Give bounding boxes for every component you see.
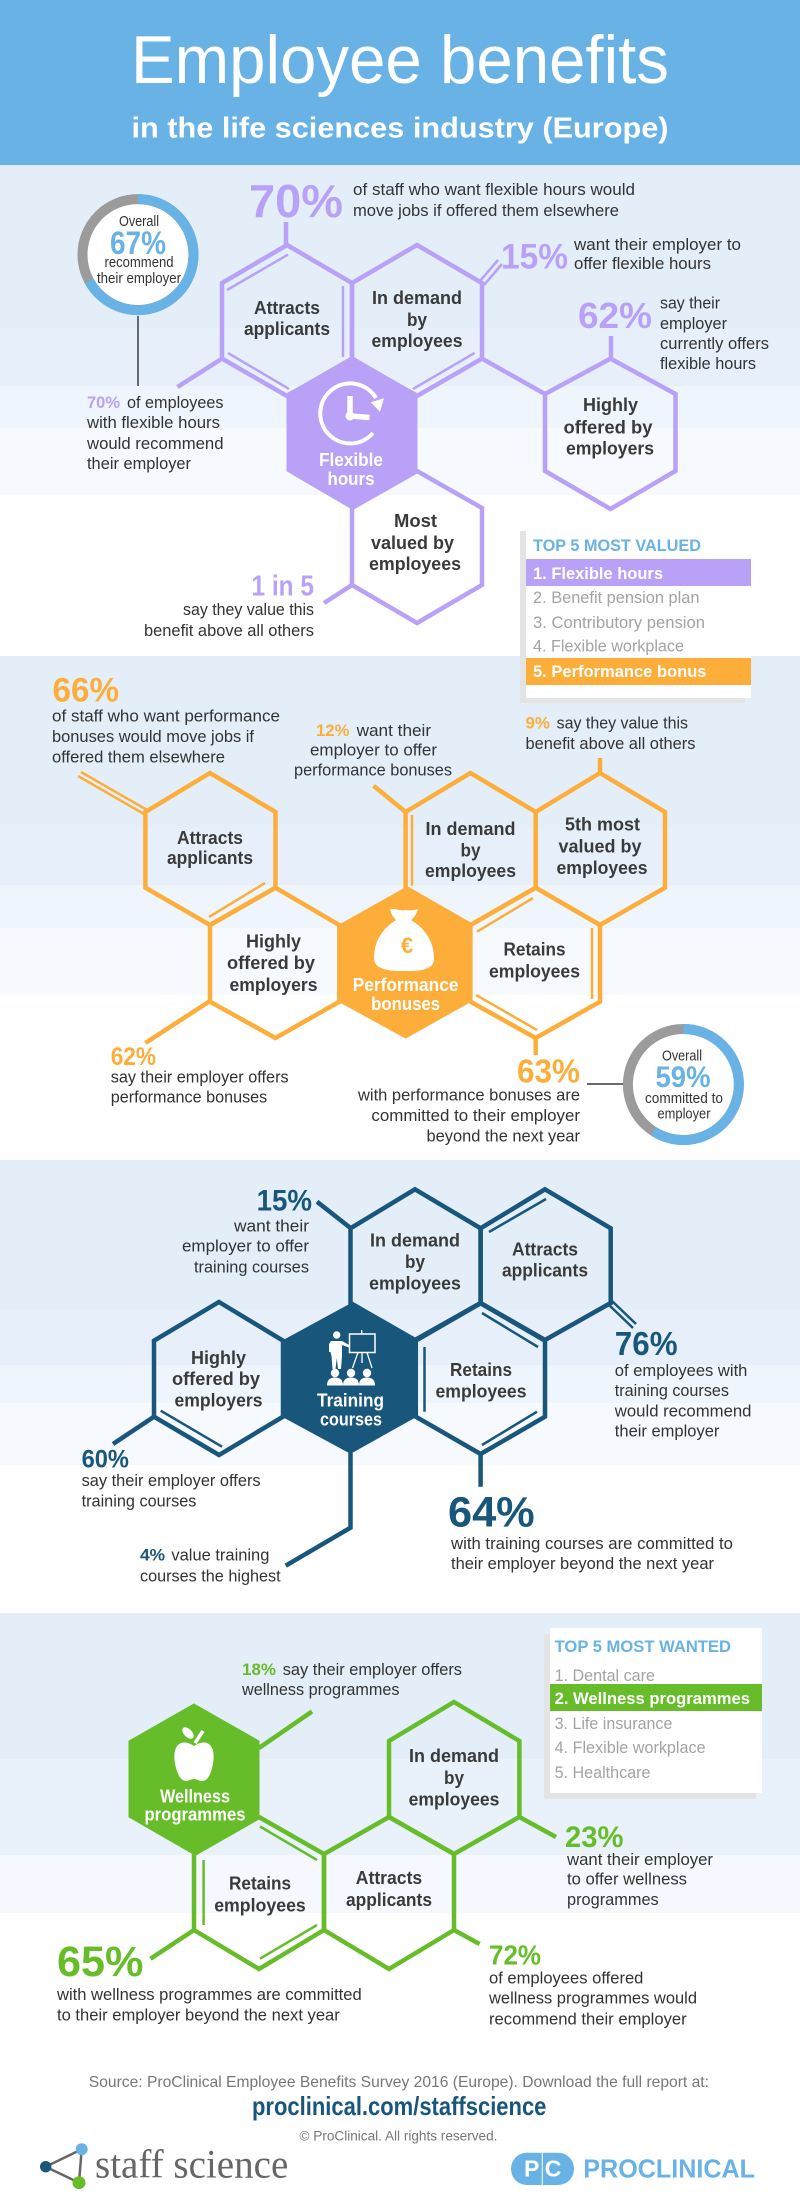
stat: 12% want: 12%	[316, 721, 350, 740]
panel: top 5 most wanted: 5. Healthcare	[555, 1763, 650, 1782]
hexagon: retains employees: employees	[436, 1381, 526, 1402]
hexagon: attracts applicants: applicants	[167, 847, 253, 868]
panel: performance bonuses	[52, 672, 739, 1146]
stat: 4% value: value training	[171, 1546, 269, 1565]
hexagon: attracts applicants: applicants	[244, 318, 330, 339]
donut: 67% recommend	[82, 199, 194, 310]
stat: 12% want: want their	[356, 721, 431, 740]
stat: 12% want: performance bonuses	[294, 761, 452, 780]
panel: top 5 most wanted	[544, 1628, 762, 1799]
connector: stat to donut	[587, 1083, 624, 1085]
stat: 1 in 5: 1 in 5	[252, 570, 314, 602]
stat: 65% committed: with wellness programmes are committed	[56, 1985, 362, 2004]
panel: top 5 most wanted: 1. Dental care	[555, 1666, 655, 1685]
stat: 15% want: want their	[233, 1217, 309, 1236]
stat: 23% want	[565, 1821, 713, 1909]
stat: 4% value	[140, 1546, 281, 1586]
hexagon: attracts applicants	[222, 245, 352, 396]
stat: 65% committed: to their employer beyond the next year	[57, 2006, 340, 2025]
stat: 76% recommend: their employer	[615, 1422, 720, 1441]
hexagon: 5th most valued	[536, 773, 665, 925]
stat: 70% recommend: of employees	[127, 393, 224, 412]
stat: 1 in 5	[144, 570, 314, 640]
icon: presenter and audience	[327, 1330, 375, 1386]
hexagon: in demand by employees: by	[407, 309, 428, 330]
hexagon: highly offered by employers: Highly	[583, 394, 639, 415]
stat: 65% committed	[56, 1938, 362, 2025]
panel: top 5 most valued: 2. Benefit pension plan	[533, 588, 700, 607]
donut: 59% committed: committed to	[645, 1090, 723, 1107]
connector: 15% double line	[480, 260, 502, 285]
stat: 9% value: benefit above all others	[526, 734, 696, 753]
stat: 15% want: training courses	[194, 1258, 309, 1277]
hexagon: highly offered by employers: offered by	[564, 416, 653, 438]
stat: 64% committed: their employer beyond the next year	[451, 1554, 714, 1573]
hexagon: in demand by employees: In demand	[409, 1745, 499, 1766]
stat: 64% committed: 64%	[448, 1489, 535, 1537]
stat: 72% recommend: wellness programmes would	[488, 1988, 697, 2008]
hexagon: most valued by employees	[352, 471, 482, 623]
stat: 70% would move jobs: of staff who want flexible hours would	[353, 180, 635, 199]
hexagon: in demand by employees: In demand	[370, 1230, 460, 1251]
connector lines	[113, 1202, 481, 1566]
hexagon: highly offered by employers	[154, 1302, 283, 1455]
stat: 9% value	[526, 714, 696, 753]
logo: proclinical: C	[545, 2156, 561, 2182]
hexagon: highly offered by employers	[210, 888, 339, 1038]
donut: 59% committed	[628, 1029, 739, 1140]
stat: 70% would move jobs: 70%	[249, 175, 343, 227]
stat: 15% want: employer to offer	[182, 1237, 309, 1256]
hexagon: attracts applicants: applicants	[346, 1889, 432, 1910]
connector lines	[150, 1712, 556, 1959]
stat: 62% offers: currently offers	[660, 334, 769, 353]
stat: 15% want	[182, 1185, 312, 1277]
stat: 4% value: 4%	[140, 1546, 165, 1565]
stat: 62% offers: say their	[660, 294, 720, 312]
hexagon: attracts applicants: Attracts	[177, 827, 243, 848]
connector: 66% double line	[78, 772, 147, 814]
panel: top 5 most valued: 4. Flexible workplace	[533, 636, 684, 656]
hexagon: attracts applicants: Attracts	[254, 297, 320, 318]
hexagon: in demand by employees: employees	[372, 330, 462, 351]
stat: 63% committed: beyond the next year	[426, 1127, 580, 1146]
stat: 70% would move jobs: move jobs if offered them elsewhere	[353, 201, 619, 220]
donut: 59% committed: employer	[658, 1106, 710, 1123]
connector: donut to stat	[137, 316, 139, 386]
report url: proclinical.com/staffscience	[252, 2091, 546, 2121]
donut: 67% recommend: recommend	[104, 254, 174, 271]
stat: 1 in 5: say they value this	[183, 600, 314, 619]
stat: 60% offers: 60%	[82, 1445, 129, 1473]
stat: 76% recommend: would recommend	[614, 1402, 752, 1421]
hexagon: highly offered by employers	[545, 359, 676, 509]
central hexagon: wellness programmes: Wellness	[160, 1787, 230, 1807]
panel: top 5 most wanted: TOP 5 MOST WANTED	[555, 1637, 731, 1656]
hexagon: in demand by employees: employees	[425, 860, 516, 881]
stat: 60% offers: say their employer offers	[82, 1471, 261, 1490]
stat: 62% offers: performance bonuses	[111, 1088, 267, 1107]
panel: wellness programmes	[56, 1628, 762, 2029]
stat: 15% want: offer flexible hours	[574, 254, 711, 273]
hexagon: highly offered by employers: employers	[566, 438, 654, 458]
donut: 59% committed: Overall	[662, 1048, 702, 1065]
hexagon: highly offered by employers: offered by	[172, 1368, 261, 1389]
panel: top 5 most valued: TOP 5 MOST VALUED	[533, 536, 701, 555]
panel: training courses	[82, 1185, 752, 1586]
stat: 62% offers	[111, 1043, 289, 1107]
hexagon: most valued by employees: Most	[394, 510, 437, 531]
stat: 62% offers: employer	[660, 314, 727, 333]
subtitle: in the life sciences industry (Europe)	[132, 112, 668, 144]
stat: 66% would move jobs: bonuses would move jobs if	[52, 727, 254, 746]
copyright: © ProClinical. All rights reserved.	[300, 2128, 497, 2144]
connector lines	[178, 222, 611, 603]
hexagon: attracts applicants: Attracts	[356, 1867, 422, 1888]
hexagon: in demand by employees: by	[460, 840, 481, 861]
hexagon: retains employees: Retains	[229, 1873, 291, 1894]
stat: 66% would move jobs: of staff who want performance	[52, 707, 280, 726]
central hexagon: performance bonuses	[339, 888, 470, 1038]
panel: top 5 most valued: 3. Contributory pension	[533, 613, 705, 632]
connector lines	[145, 758, 600, 1055]
stat: 23% want: want their employer	[566, 1850, 713, 1869]
icon: apple	[174, 1725, 214, 1781]
stat: 23% want: to offer wellness	[567, 1870, 687, 1889]
logo: proclinical: P	[524, 2156, 539, 2182]
hexagon: in demand by employees: In demand	[426, 818, 516, 839]
stat: 60% offers: training courses	[82, 1492, 196, 1511]
stat: 70% recommend: with flexible hours	[86, 413, 220, 432]
header	[0, 0, 800, 165]
hexagon: attracts applicants	[145, 773, 276, 925]
hexagon: attracts applicants	[324, 1817, 454, 1969]
stat: 15% want: 15%	[257, 1185, 312, 1218]
title: Employee benefits	[131, 22, 669, 98]
stat: 62% offers	[578, 294, 769, 373]
hexagon: retains employees	[416, 1303, 545, 1454]
stat: 23% want: 23%	[565, 1821, 624, 1854]
hexagon: in demand by employees: by	[405, 1251, 426, 1272]
stat: 18% offers: wellness programmes	[241, 1680, 400, 1699]
stat: 70% recommend: 70%	[87, 393, 120, 412]
hexagon: in demand by employees: employees	[409, 1788, 499, 1809]
stat: 63% committed: committed to their employer	[371, 1106, 580, 1125]
donut: 59% committed: 59%	[656, 1061, 710, 1094]
stat: 15% want	[501, 235, 741, 276]
stat: 76% recommend	[614, 1325, 752, 1441]
hexagon: retains employees: Retains	[504, 939, 566, 960]
stat: 62% offers: say their employer offers	[111, 1068, 289, 1087]
stat: 18% offers	[241, 1660, 462, 1699]
stat: 62% offers: flexible hours	[660, 354, 756, 373]
stat: 70% would move jobs	[249, 175, 635, 227]
hexagon: retains employees: employees	[214, 1894, 306, 1916]
stat: 18% offers: 18%	[242, 1660, 276, 1679]
hexagon: in demand by employees	[352, 245, 482, 396]
stat: 12% want	[294, 721, 452, 780]
central hexagon: training courses: Training	[317, 1391, 384, 1411]
stat: 70% recommend	[86, 393, 224, 473]
central hexagon: training courses: courses	[320, 1410, 382, 1430]
hexagon: 5th most valued: 5th most	[565, 814, 640, 835]
hexagon: in demand by employees: by	[444, 1767, 465, 1788]
hexagon: highly offered by employers: offered by	[227, 952, 316, 973]
stat: 66% would move jobs	[52, 672, 280, 767]
stat: 64% committed: with training courses are committed to	[450, 1534, 733, 1553]
stat: 63% committed	[357, 1053, 580, 1146]
donut: 67% recommend: Overall	[119, 213, 159, 230]
stat: 66% would move jobs: offered them elsewhere	[52, 748, 225, 767]
hexagon: highly offered by employers: employers	[230, 974, 318, 995]
central hexagon: wellness programmes	[129, 1704, 259, 1854]
stat: 62% offers: 62%	[111, 1043, 156, 1071]
stat: 66% would move jobs: 66%	[52, 672, 119, 710]
hexagon: highly offered by employers: employers	[174, 1390, 262, 1411]
stat: 76% recommend: training courses	[615, 1381, 729, 1400]
panel: top 5 most wanted: 2. Wellness programmes	[555, 1689, 750, 1708]
logo: proclinical	[511, 2153, 755, 2185]
central hexagon: performance bonuses: Performance	[353, 975, 458, 995]
hexagon: 5th most valued: valued by	[558, 836, 642, 857]
hexagon: in demand by employees: In demand	[372, 287, 462, 308]
hexagon: retains employees	[470, 888, 600, 1038]
donut: 67% recommend: their employer	[97, 270, 181, 287]
panel: top 5 most valued: 5. Performance bonus	[533, 662, 706, 681]
stat: 64% committed	[448, 1489, 733, 1573]
hexagon: 5th most valued: employees	[556, 857, 648, 878]
hexagon: attracts applicants: applicants	[502, 1260, 588, 1281]
hexagon: retains employees	[194, 1817, 324, 1969]
stat: 63% committed: with performance bonuses are	[357, 1086, 580, 1105]
stat: 18% offers: say their employer offers	[283, 1660, 462, 1679]
stat: 62% offers: 62%	[578, 295, 652, 336]
icon: money bag	[374, 909, 434, 971]
central hexagon: flexible hours: hours	[328, 469, 374, 489]
icon: money bag: €	[401, 933, 413, 958]
panel: top 5 most wanted: 4. Flexible workplace	[555, 1738, 706, 1757]
stat: 72% recommend: 72%	[489, 1939, 541, 1970]
stat: 65% committed: 65%	[57, 1938, 143, 1986]
stat: 1 in 5: benefit above all others	[144, 621, 314, 640]
hexagon: in demand by employees	[406, 773, 536, 925]
central hexagon: flexible hours	[287, 359, 417, 509]
connector: 76% double line	[609, 1301, 636, 1328]
stat: 70% recommend: would recommend	[86, 434, 223, 453]
hexagon: in demand by employees: employees	[369, 1272, 461, 1293]
stat: 72% recommend: recommend their employer	[489, 2010, 687, 2029]
stat: 72% recommend	[488, 1939, 697, 2029]
central hexagon: flexible hours: Flexible	[319, 450, 383, 470]
central hexagon: wellness programmes: programmes	[144, 1805, 246, 1825]
hexagon: in demand by employees	[350, 1189, 481, 1340]
donut: 67% recommend: 67%	[110, 225, 166, 261]
panel: top 5 most valued: 1. Flexible hours	[533, 564, 663, 583]
icon: clock	[320, 383, 384, 443]
central hexagon: performance bonuses: bonuses	[371, 994, 440, 1014]
stat: 9% value: 9%	[526, 714, 550, 733]
panel: top 5 most valued	[520, 531, 751, 703]
stat: 60% offers	[82, 1445, 261, 1511]
stat: 76% recommend: of employees with	[615, 1361, 747, 1380]
hexagon: most valued by employees: employees	[369, 553, 461, 574]
panel: flexible hours	[82, 175, 769, 703]
hexagon: most valued by employees: valued by	[371, 532, 455, 553]
stat: 76% recommend: 76%	[615, 1325, 678, 1362]
source line: Source: ProClinical Employee Benefits Survey 2016 (Europe). Download the full report at:	[89, 2074, 709, 2091]
hexagon: in demand by employees	[389, 1702, 519, 1854]
footer	[40, 2074, 755, 2189]
stat: 23% want: programmes	[567, 1890, 659, 1909]
hexagon: attracts applicants	[481, 1189, 611, 1340]
stat: 15% want: want their employer to	[573, 235, 741, 254]
hexagon: highly offered by employers: Highly	[246, 931, 302, 952]
stat: 72% recommend: of employees offered	[489, 1969, 643, 1988]
central hexagon: training courses	[283, 1304, 416, 1453]
stat: 4% value: courses the highest	[140, 1567, 281, 1586]
stat: 9% value: say they value this	[557, 714, 688, 733]
stat: 63% committed: 63%	[517, 1053, 580, 1090]
stat: 70% recommend: their employer	[87, 454, 191, 473]
panel: top 5 most wanted: 3. Life insurance	[555, 1714, 672, 1733]
hexagon: retains employees: Retains	[450, 1359, 512, 1380]
stat: 12% want: employer to offer	[310, 741, 437, 760]
logo: staff science: staff science	[95, 2142, 288, 2187]
hexagon: attracts applicants: Attracts	[512, 1239, 578, 1260]
hexagon: retains employees: employees	[489, 961, 580, 982]
stat: 15% want: 15%	[501, 238, 568, 276]
logo: proclinical: PROCLINICAL	[583, 2154, 755, 2184]
hexagon: highly offered by employers: Highly	[191, 1347, 247, 1368]
